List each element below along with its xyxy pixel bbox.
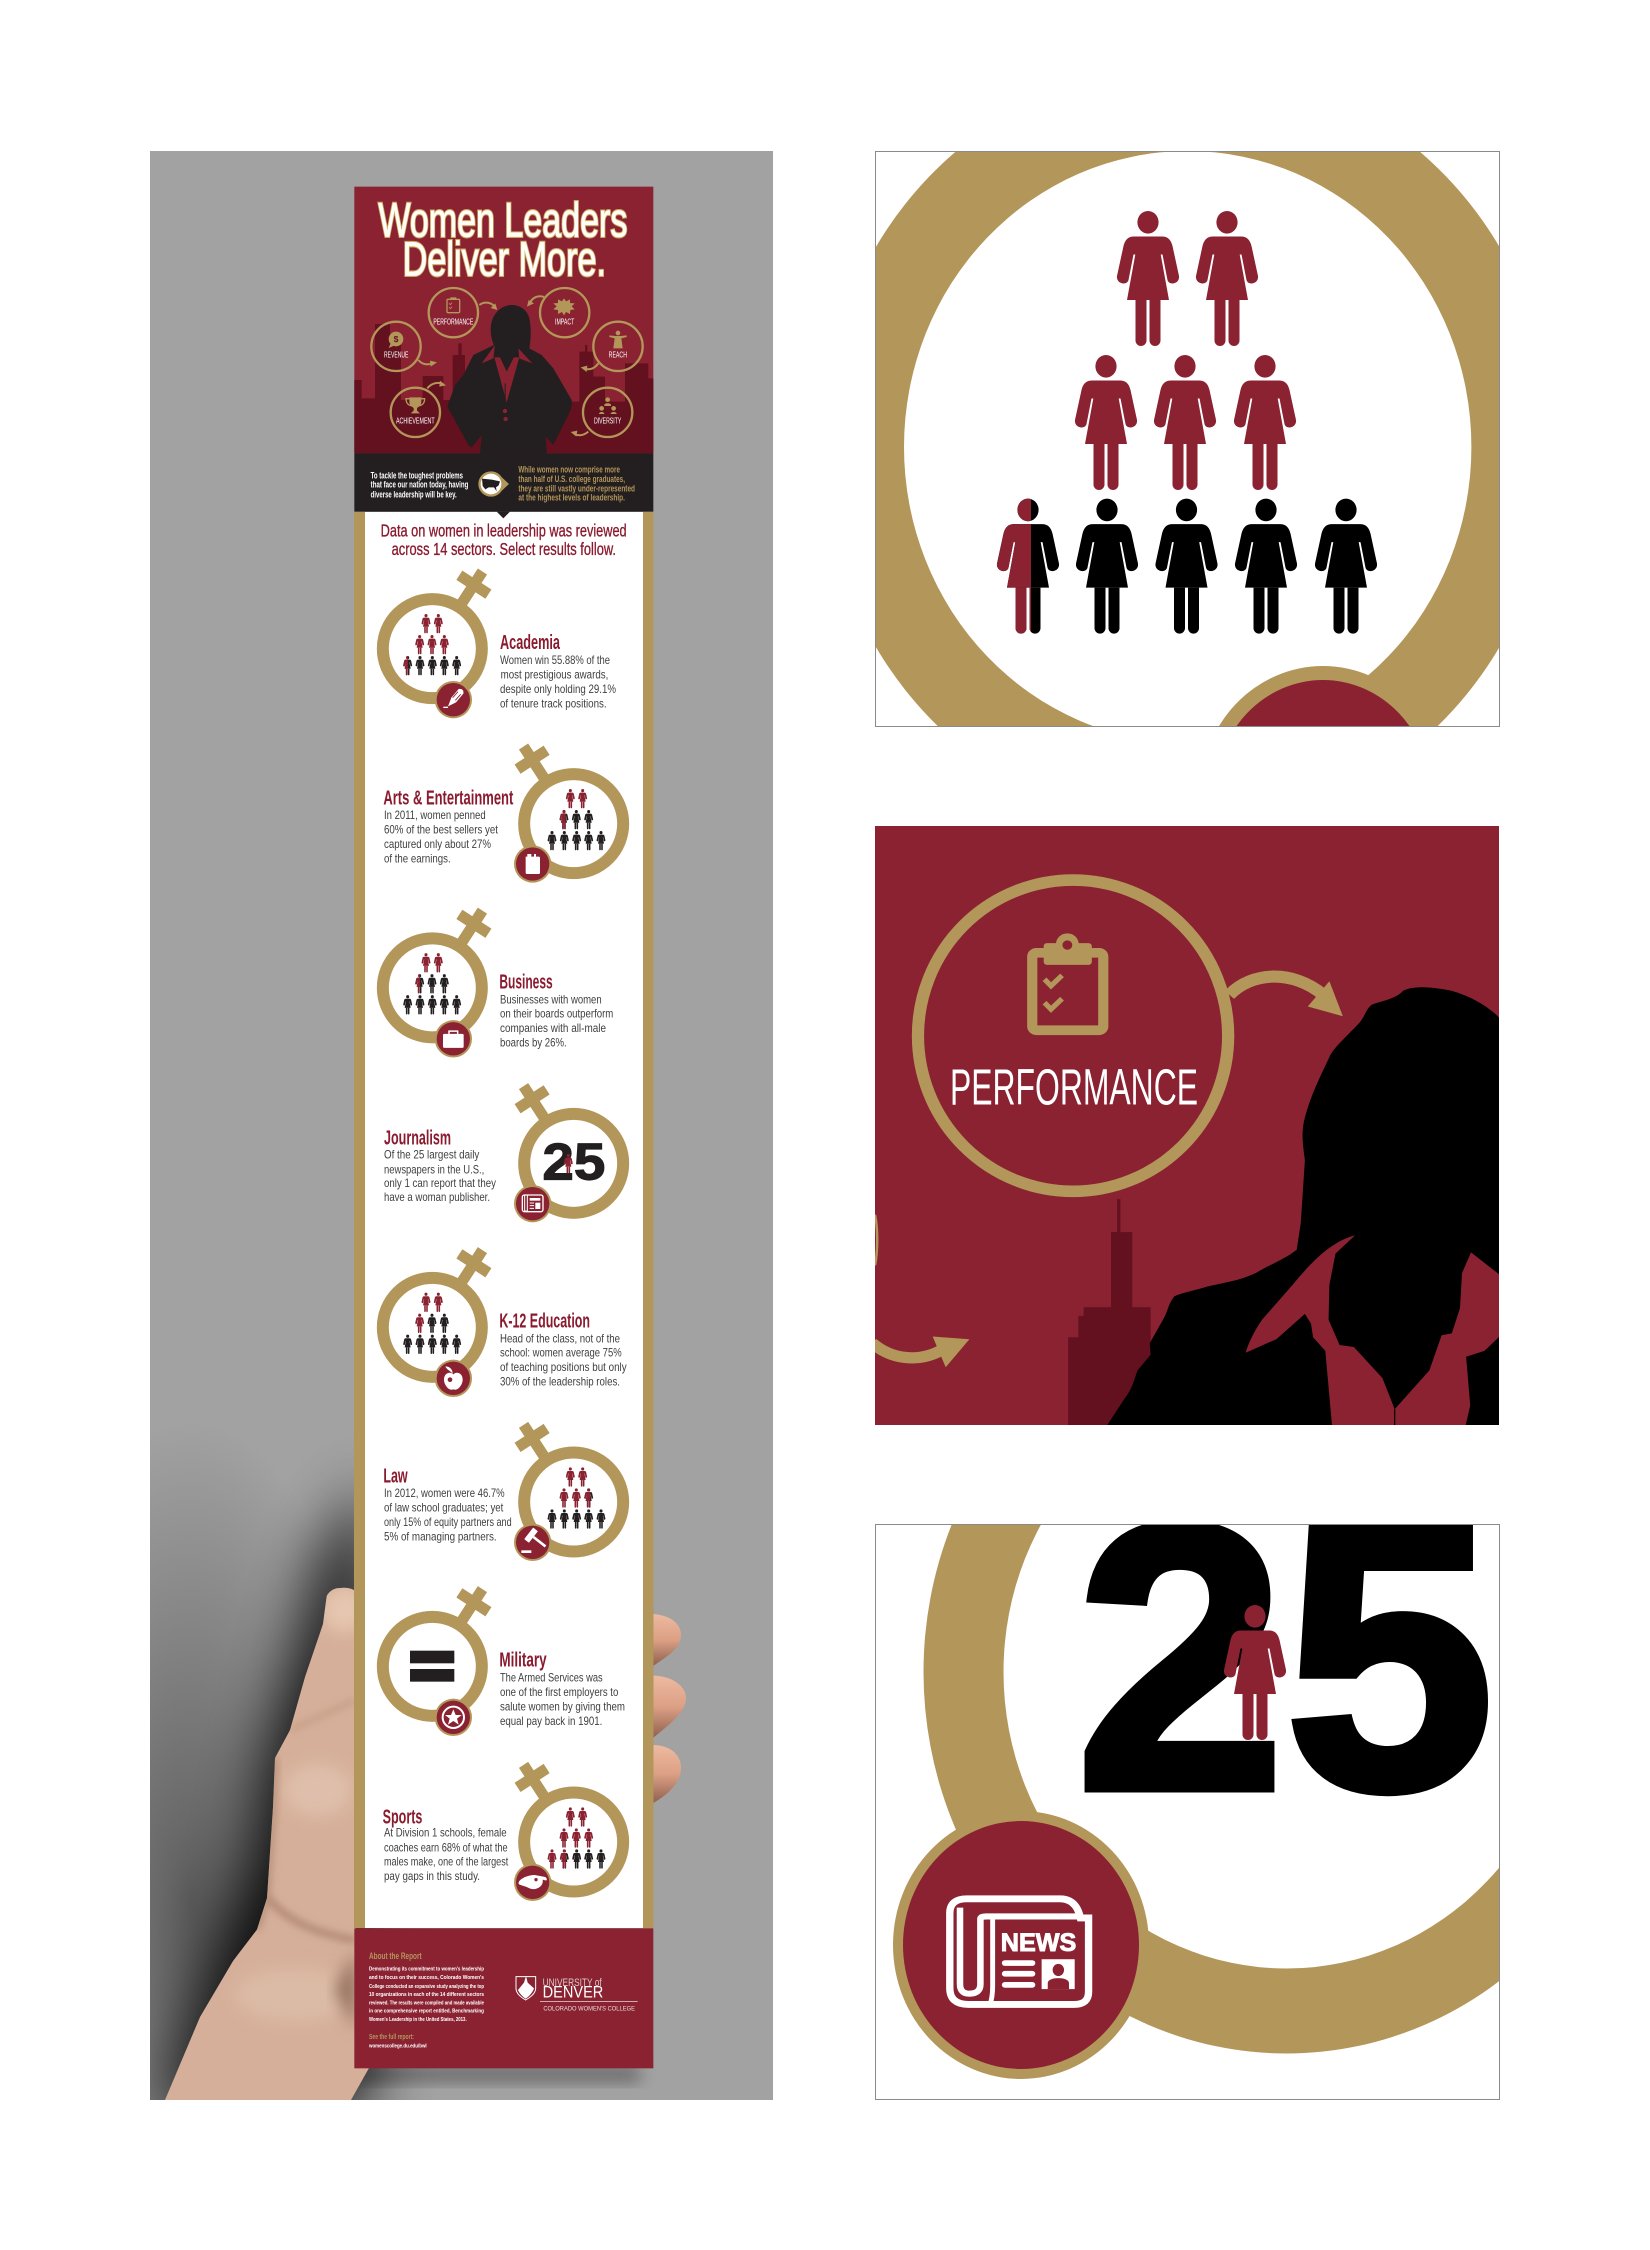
- text: Arts: captured only about 27%: [384, 838, 491, 851]
- impact badge: IMPACT: [555, 317, 574, 326]
- text: Sports: Sports: [383, 1805, 422, 1828]
- intro text left: diverse leadership will be key.: [371, 490, 457, 500]
- text: Arts: of the earnings.: [384, 852, 451, 865]
- performance badge: [429, 288, 497, 337]
- label: performance: PERFORMANCE: [950, 1058, 1198, 1116]
- about the report text: About the Report: [369, 1951, 422, 1961]
- intro text left: that face our nation today, having: [371, 480, 468, 490]
- performance badge: PERFORMANCE: [433, 317, 473, 326]
- text: Military: [499, 1649, 625, 1728]
- silhouette: [1105, 987, 1505, 1429]
- intro text left: To tackle the toughest problems: [371, 470, 463, 480]
- text: Academia: despite only holding 29.1%: [500, 683, 616, 696]
- text: Journalism: only 1 can report that they: [384, 1177, 496, 1190]
- panel: pictogram detail: [875, 151, 1500, 727]
- enlarged badge: [1219, 666, 1410, 726]
- text: Academia: Academia: [500, 631, 560, 654]
- text: K-12 Education: 30% of the leadership roles.: [500, 1376, 620, 1389]
- section: Academia: [383, 562, 616, 718]
- poster header: [354, 187, 653, 453]
- text: Journalism: Of the 25 largest daily: [384, 1149, 479, 1162]
- text: Business: [499, 970, 613, 1050]
- text: K-12 Education: Head of the class, not of the: [500, 1332, 620, 1345]
- hand holding the poster: [150, 1580, 686, 2110]
- heading: data on women: Data on women in leadership was reviewed: [381, 521, 627, 541]
- achievement badge: [391, 381, 446, 437]
- footer: [354, 1928, 653, 2068]
- collar and shirt: [1246, 1235, 1505, 1433]
- arrow lower left: [872, 1343, 944, 1358]
- section: K-12 Education: [383, 1241, 627, 1397]
- about the report text: See the full report:: [369, 2032, 414, 2041]
- revenue badge: $: [394, 334, 399, 344]
- section: Military: [383, 1580, 625, 1736]
- badge with news icon: NEWS: [1001, 1928, 1076, 1957]
- text: Journalism: [384, 1126, 496, 1204]
- about the report text: 10 organizations in each of the 14 different sectors: [369, 1992, 484, 1998]
- about the report text: reviewed. The results were compiled and made available: [369, 2000, 484, 2006]
- intro band: [354, 453, 653, 518]
- text: Sports: At Division 1 schools, female: [384, 1827, 507, 1840]
- text: Business: Business: [499, 970, 553, 993]
- about the report text: Women's Leadership in the United States, 2013.: [369, 2017, 467, 2023]
- university of denver logo: DENVER: [543, 1983, 603, 2002]
- section: Journalism: [384, 1077, 623, 1222]
- photo mockup background: [150, 151, 773, 2110]
- text: Military: salute women by giving them: [500, 1701, 625, 1714]
- revenue badge: REVENUE: [384, 351, 408, 360]
- university of denver logo: UNIVERSITY of: [543, 1977, 602, 1989]
- icon: clipboard: [1032, 933, 1103, 1030]
- revenue badge: [371, 322, 437, 371]
- text: K-12 Education: of teaching positions but only: [500, 1361, 627, 1374]
- reach badge: REACH: [609, 351, 627, 360]
- text: Law: of law school graduates; yet: [384, 1502, 504, 1515]
- diversity badge: [571, 388, 632, 437]
- text: Military: The Armed Services was: [500, 1672, 603, 1685]
- panel: performance detail: [872, 826, 1505, 1448]
- female symbol with equals sign: [383, 1580, 497, 1736]
- section: Business: [383, 901, 613, 1057]
- text: Arts: [383, 786, 513, 865]
- about the report text: College conducted an expansive study analyzing the top: [369, 1984, 484, 1990]
- achievement badge: ACHIEVEMENT: [396, 417, 435, 426]
- poster body: [354, 512, 654, 1928]
- female symbol with pictogram: [383, 1241, 497, 1397]
- text: K-12 Education: K-12 Education: [499, 1309, 590, 1332]
- text: Arts: Arts & Entertainment: [383, 786, 513, 809]
- figures row 1: [1117, 211, 1258, 346]
- text: Law: [383, 1465, 512, 1544]
- text: Sports: [383, 1805, 509, 1883]
- heading: data on women: [381, 521, 627, 559]
- text: Sports: coaches earn 68% of what the: [384, 1841, 508, 1854]
- text: Academia: most prestigious awards,: [501, 668, 608, 681]
- text: Business: on their boards outperform: [500, 1008, 613, 1021]
- icon: US map pointer: [478, 471, 509, 497]
- text: Academia: [500, 631, 616, 710]
- text: Arts: In 2011, women penned: [384, 809, 486, 822]
- section: Sports: [383, 1755, 623, 1901]
- figures row 3: [997, 499, 1377, 634]
- panel: 25 detail: [875, 1524, 1500, 2100]
- female symbol with pictogram: [383, 562, 497, 718]
- intro text right: While women now comprise more: [518, 465, 620, 475]
- text: Military: one of the first employers to: [500, 1686, 618, 1699]
- about the report text: Demonstrating its commitment to women's leadership: [369, 1967, 484, 1973]
- intro text right: [518, 465, 635, 502]
- text: K-12 Education: school: women average 75%: [500, 1347, 622, 1360]
- performance ring: [918, 880, 1228, 1191]
- text: Business: Businesses with women: [500, 993, 602, 1006]
- skyscraper: [1068, 1199, 1151, 1448]
- about the report text: and to focus on their success, Colorado Women's: [369, 1975, 484, 1981]
- text: Academia: Women win 55.88% of the: [500, 654, 610, 667]
- university of denver logo: COLORADO WOMEN'S COLLEGE: [543, 2006, 635, 2013]
- skyline: [354, 324, 653, 453]
- big number 25: 25: [1076, 1447, 1494, 1869]
- female symbol with 25: 25: [542, 1133, 605, 1191]
- intro text right: than half of U.S. college graduates,: [518, 474, 625, 484]
- title: Women Leaders: [378, 194, 627, 248]
- text: Business: companies with all-male: [500, 1022, 606, 1035]
- text: Law: 5% of managing partners.: [384, 1531, 497, 1544]
- text: Law: Law: [383, 1465, 408, 1488]
- intro text right: at the highest levels of leadership.: [518, 492, 625, 502]
- text: Military: equal pay back in 1901.: [500, 1715, 602, 1728]
- arrow to figure: [1229, 977, 1323, 995]
- heading: data on women: across 14 sectors. Select results follow.: [392, 539, 616, 559]
- woman figure: [1224, 1605, 1286, 1740]
- woman silhouette: [447, 305, 572, 453]
- impact badge: [527, 288, 589, 337]
- text: Military: Military: [499, 1649, 547, 1672]
- text: Sports: males make, one of the largest: [384, 1856, 509, 1869]
- text: Law: In 2012, women were 46.7%: [384, 1487, 505, 1500]
- badge with news icon: [893, 1811, 1149, 2079]
- reach badge: [581, 322, 643, 372]
- intro text right: they are still vastly under-represented: [518, 483, 635, 493]
- enlarged ring: [876, 152, 1499, 726]
- text: Journalism: Journalism: [384, 1126, 451, 1149]
- figures row 2: [1075, 355, 1296, 490]
- female symbol with pictogram: [509, 1415, 623, 1561]
- female symbol with pictogram: [509, 1755, 623, 1901]
- diversity badge: DIVERSITY: [594, 417, 622, 426]
- about the report text: in one comprehensive report entitled, Benchmarking: [369, 2009, 484, 2015]
- title: [378, 194, 627, 287]
- intro text left: [371, 470, 468, 500]
- female symbol with 25: [509, 1077, 623, 1222]
- title: Women Leaders: [378, 194, 627, 248]
- section: Arts & Entertainment: [383, 737, 623, 883]
- text: Academia: of tenure track positions.: [500, 697, 607, 710]
- text: Journalism: newspapers in the U.S.,: [384, 1163, 484, 1176]
- university of denver logo: [516, 1976, 638, 2013]
- text: Journalism: have a woman publisher.: [384, 1191, 490, 1204]
- title: Deliver More.: [403, 233, 606, 287]
- title: Deliver More.: [403, 233, 606, 287]
- text: Arts: 60% of the best sellers yet: [384, 823, 499, 836]
- text: Sports: pay gaps in this study.: [384, 1870, 480, 1883]
- female symbol with pictogram: [383, 901, 497, 1057]
- about the report text: [368, 1951, 484, 2049]
- about the report text: womenscollege.du.edu/bwl: [368, 2043, 427, 2049]
- section: Law: [383, 1415, 623, 1561]
- enlarged ring: [924, 1525, 1499, 2054]
- female symbol with pictogram: [509, 737, 623, 883]
- text: K-12 Education: [499, 1309, 627, 1389]
- text: Business: boards by 26%.: [500, 1037, 567, 1050]
- text: Law: only 15% of equity partners and: [384, 1516, 512, 1529]
